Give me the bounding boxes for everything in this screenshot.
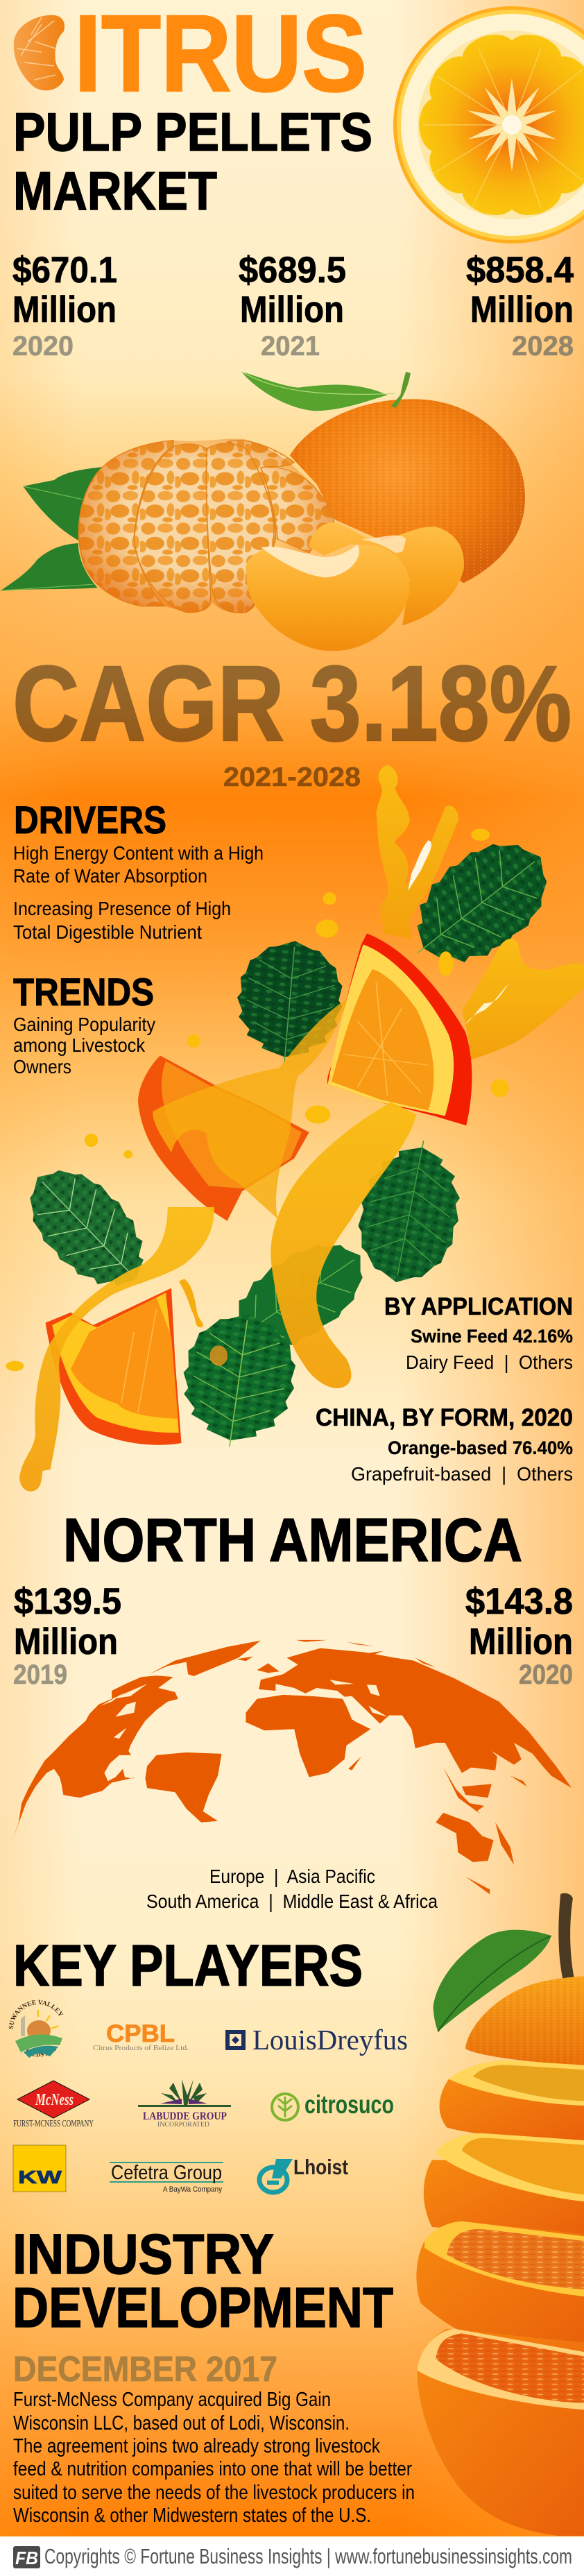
logo: LaBudde Group [138,2079,231,2128]
segment: China by form: CHINA, BY FORM, 2020 [316,1404,573,1431]
logo: Citrosuco: citrosuco [304,2090,394,2119]
New Zealand [465,1877,490,1894]
heading: industry development [12,2223,393,2339]
segment: by application: Dairy Feed | Others [406,1351,573,1373]
world map [12,1640,572,1894]
logo: Furst-McNess: McNess [35,2091,74,2109]
juice stream across wedge [153,998,348,1219]
logo: Suwannee Valley Feeds [8,1999,64,2058]
juice stream lower left [19,1207,214,1492]
text: development description: Wisconsin LLC, based out of Lodi, Wisconsin. [13,2412,350,2434]
text: development description: suited to serve the needs of the livestock producers in [13,2482,415,2504]
segment: China by form: Orange-based 76.40% [388,1438,573,1458]
slice two [440,2061,584,2142]
footer [0,2536,584,2576]
mint leaf lower left [8,1148,171,1313]
British Isles and Iceland [237,1657,280,1673]
North and Central America [12,1675,178,1841]
stat: North America 2019: Million [14,1621,118,1662]
logo: Cefetra Group: A BayWa Company [163,2185,222,2194]
text: development description: The agreement joins two already strong livestock [13,2435,380,2457]
text: development description [13,2389,415,2527]
illustration: juice splash, orange wedges and mint leaves [6,765,584,1492]
heading: industry development: INDUSTRY [12,2223,274,2286]
South America [145,1752,222,1823]
logo: Cefetra Group: Cefetra Group [111,2162,222,2184]
text: driver two: Total Digestible Nutrient [13,921,202,943]
juice stream center [270,1102,416,1388]
stat: 2028 market size [466,250,574,361]
heading: drivers: DRIVERS [14,798,166,842]
logo: Cefetra Group [110,2162,223,2194]
segment: by application: Swine Feed 42.16% [411,1326,573,1347]
text: driver two: Increasing Presence of High [13,898,231,919]
juice splash right [462,939,584,1059]
text: trend: among Livestock [13,1034,146,1056]
top half orange [465,1976,584,2065]
heading: trends: TRENDS [13,970,154,1014]
stat: 2020 market size: 2020 [12,331,74,361]
segment: by application [384,1293,573,1373]
title: pulp pellets market [13,101,372,221]
logo: Suwannee Valley Feeds: FEEDS LLC [26,2049,56,2056]
orange wedge left [138,1055,309,1221]
segment: China by form: Grapefruit-based | Others [351,1463,573,1485]
stat: 2028 market size: Million [470,289,574,330]
other regions: Europe | Asia Pacific [209,1866,375,1887]
juice drip [179,1279,203,1327]
heading: North America: NORTH AMERICA [63,1505,522,1574]
logo: LaBudde Group: LABUDDE GROUP [143,2110,227,2122]
Arctic islands [296,1640,506,1710]
logo: CPBL: Citrus Products of Belize Ltd. [93,2044,189,2052]
Madagascar [348,1757,361,1771]
segment: China by form [316,1404,573,1485]
text: development description: Wisconsin & other Midwestern states of the U.S. [13,2505,371,2527]
slice four [416,2221,584,2351]
illustration: mandarin fruits [1,372,525,651]
logo: Furst-McNess [13,2081,94,2129]
title: pulp pellets market: MARKET [13,160,217,221]
mint leaf lower right [347,1131,472,1292]
stat: North America 2019: $139.5 [14,1581,121,1622]
logo: KW [13,2145,66,2192]
juice droplets [85,829,509,1159]
stat: 2028 market size: $858.4 [466,250,574,291]
slice five [417,2329,584,2536]
logo: LaBudde Group: INCORPORATED [157,2121,210,2128]
heading: industry development: DEVELOPMENT [12,2276,393,2339]
inland seas [101,1680,387,1739]
juice splash top [376,765,458,939]
logo: Lhoist: Lhoist [293,2155,348,2179]
text: trend [13,1014,155,1077]
orange wedge lower [46,1288,182,1445]
leaves behind peeled mandarin [1,466,106,590]
text: driver one: High Energy Content with a High [13,842,264,864]
stem and leaf [241,372,411,411]
orange wedge right [327,934,472,1125]
segment: by application: BY APPLICATION [384,1293,573,1320]
stat: North America 2019: 2019 [13,1660,67,1690]
heading: key players: KEY PLAYERS [13,1933,363,1998]
whole orange [290,399,525,583]
Africa [246,1695,370,1777]
other regions: South America | Middle East & Africa [146,1891,438,1912]
side droplets [6,1345,227,1371]
text: driver one: Rate of Water Absorption [13,865,207,887]
icon: Fortune Business Insights logo: FB [15,2548,38,2568]
stat: 2021 market size: Million [240,289,344,330]
icon: mandarin segment as letter C [14,15,65,90]
stat: 2020 market size [12,250,117,361]
mint leaf upper right [388,819,570,991]
peeled mandarin [79,438,334,613]
text: development description: feed & nutrition companies into one that will be better [13,2458,412,2480]
stat: 2020 market size: $670.1 [12,250,117,291]
mandarin segments [246,522,464,651]
text: trend: Gaining Popularity [13,1014,155,1035]
mint leaf lower center [174,1306,304,1454]
stat: North America 2020: 2020 [519,1660,573,1690]
slice three [424,2133,584,2239]
Greenland [149,1641,261,1676]
logo: CPBL: CPBL [106,2020,175,2047]
text: driver two [13,898,231,943]
logo: Louis Dreyfus: LouisDreyfus [252,2024,408,2056]
mint leaf center [232,937,347,1068]
text: driver one [13,842,264,887]
logo: Furst-McNess: FURST-MCNESS COMPANY [13,2119,94,2129]
stat: 2021 market size [239,250,346,361]
CAGR period: 2021-2028 [223,762,361,792]
Australia [436,1813,494,1862]
stat: 2020 market size: Million [12,289,117,330]
stat: North America 2020: Million [469,1621,573,1662]
logo: Lhoist [259,2155,348,2192]
logo: Suwannee Valley Feeds: SUWANNEE VALLEY [8,1999,64,2029]
Eurasia [259,1648,572,1788]
logo: KW: KW [18,2167,62,2187]
Southeast Asia islands [443,1768,527,1865]
logo: CPBL [93,2020,189,2052]
title: pulp pellets market: PULP PELLETS [13,101,372,162]
logo: Citrosuco [272,2090,394,2120]
stat: North America 2020 [465,1581,573,1690]
other regions [146,1866,438,1912]
stat: 2021 market size: 2021 [261,331,320,361]
text: development description: Furst-McNess Company acquired Big Gain [13,2389,331,2411]
mint leaf back [207,1222,383,1377]
date: December 2017: DECEMBER 2017 [13,2349,277,2389]
stat: North America 2020: $143.8 [465,1581,573,1622]
illustration: orange slice [393,6,584,244]
stat: 2021 market size: $689.5 [239,250,346,291]
illustration: stacked orange slices [416,1893,584,2536]
stem and leaf [433,1893,576,2031]
text: trend: Owners [13,1056,71,1077]
stat: North America 2019 [13,1581,121,1690]
stat: 2028 market size: 2028 [512,331,574,361]
